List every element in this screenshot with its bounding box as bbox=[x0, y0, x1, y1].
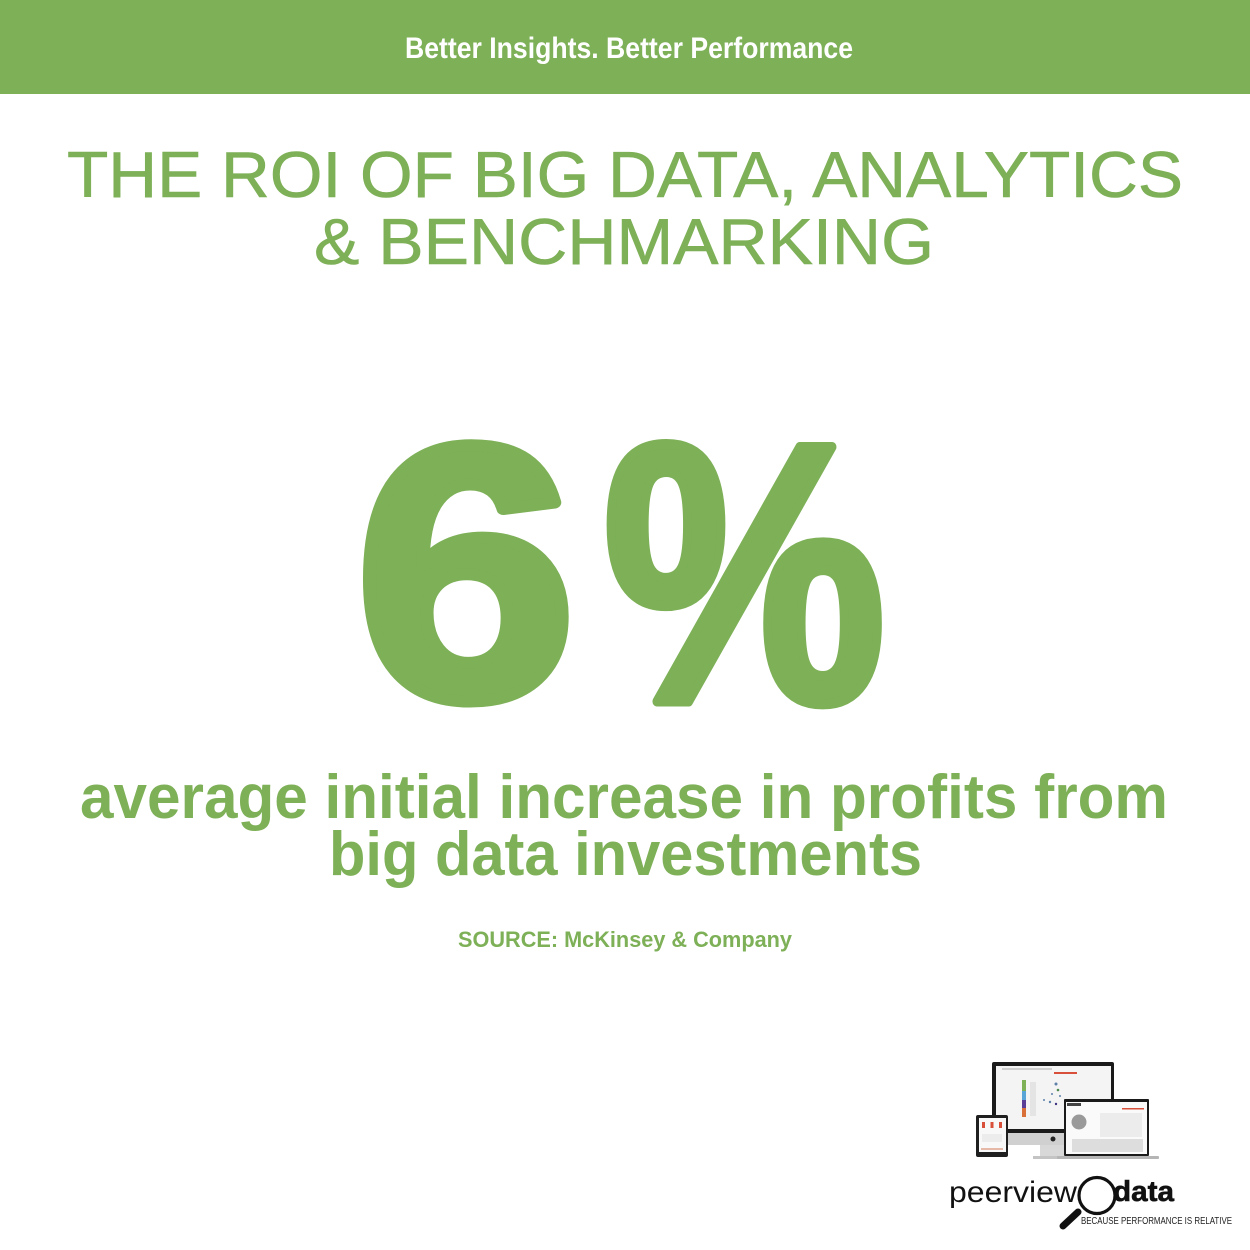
title: THE ROI OF BIG DATA, ANALYTICS bbox=[67, 138, 1183, 211]
source: SOURCE: McKinsey & Company bbox=[458, 927, 793, 952]
big statistic: 6%: % bbox=[603, 368, 886, 781]
title: & BENCHMARKING bbox=[314, 205, 934, 278]
icon: laptop bbox=[1057, 1099, 1159, 1159]
statistic description: big data investments bbox=[329, 820, 922, 889]
logo: peerview data wordmark: peerview bbox=[949, 1176, 1077, 1209]
icon: desktop monitor bbox=[992, 1062, 1114, 1159]
statistic description bbox=[80, 763, 1168, 889]
header tagline: Better Insights. Better Performance bbox=[405, 32, 853, 65]
icon: magnifying glass bbox=[1063, 1178, 1115, 1226]
icon: tablet bbox=[976, 1115, 1008, 1157]
header banner bbox=[0, 0, 1250, 94]
logo: peerview data wordmark bbox=[949, 1176, 1232, 1227]
statistic description: average initial increase in profits from bbox=[80, 763, 1168, 832]
logo: device mockups bbox=[976, 1062, 1159, 1159]
logo: peerview data wordmark: data bbox=[1113, 1176, 1175, 1208]
title bbox=[67, 138, 1183, 278]
big statistic: 6%: 6 bbox=[355, 371, 576, 775]
big statistic: 6% bbox=[355, 368, 886, 781]
